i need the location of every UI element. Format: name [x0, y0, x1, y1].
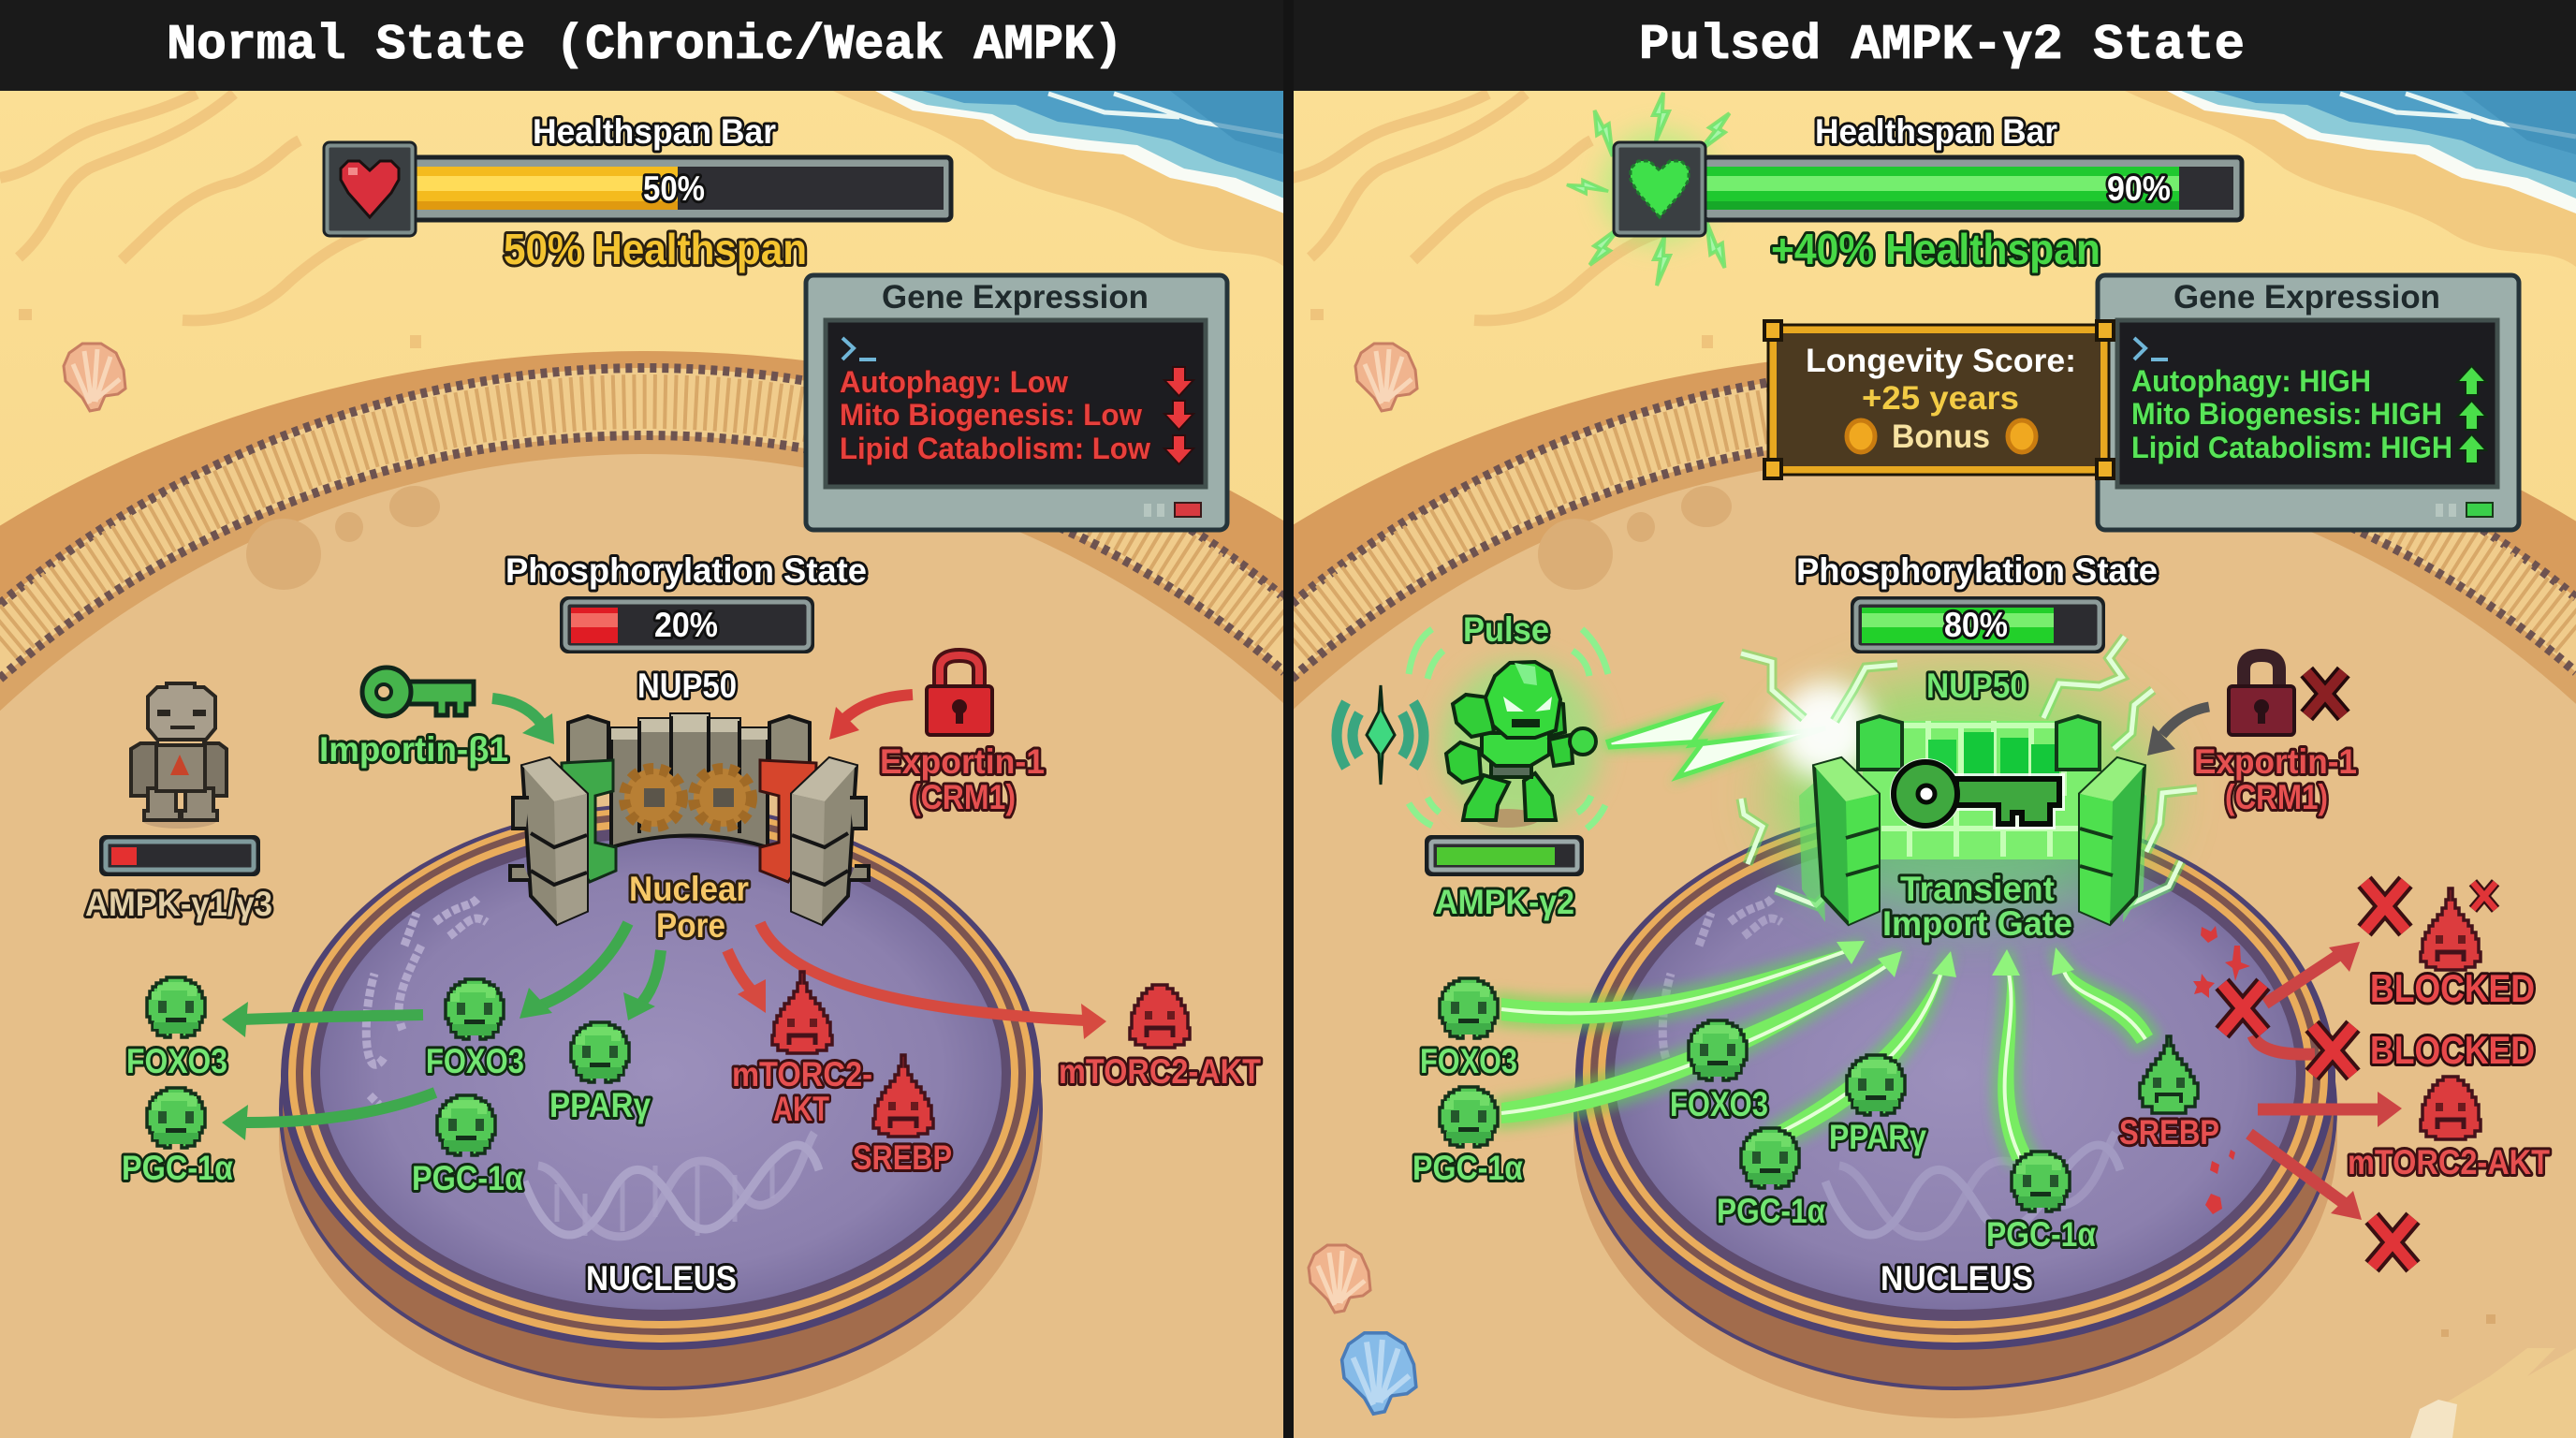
label: nuclear: Nuclear — [629, 870, 749, 908]
row: lipid catabolism: Lipid Catabolism: Low — [840, 432, 1150, 465]
icon: blocked lock — [2229, 655, 2294, 735]
panel: gene expression — [2098, 275, 2519, 530]
icon: FOXO3 inside — [1689, 1020, 1747, 1080]
label: SREBP: SREBP — [853, 1138, 952, 1177]
left panel background — [0, 91, 1283, 1438]
icon: small X — [2473, 883, 2496, 909]
label: nucleus: NUCLEUS — [1881, 1259, 2033, 1298]
row: autophagy: Autophagy: HIGH — [2131, 364, 2371, 398]
label: nup50: NUP50 — [1926, 667, 2027, 705]
pale shell fragment — [2410, 1400, 2457, 1438]
icon: mTORC2-AKT outside — [1130, 985, 1190, 1048]
phosphorylation value: 20% — [654, 606, 718, 644]
status lights — [1148, 504, 1161, 517]
label: AMPK gamma 1/3: AMPK-γ1/γ3 — [85, 885, 272, 923]
label: FOXO3 inside: FOXO3 — [426, 1042, 524, 1080]
arrow: lightning to gate — [1603, 700, 1830, 785]
label: import gate: Import Gate — [1882, 904, 2072, 943]
icon: exportin lock — [927, 655, 992, 735]
chromatin squiggles — [366, 899, 487, 1105]
gears — [624, 769, 752, 827]
label: mTORC2: mTORC2- — [732, 1055, 872, 1093]
label: FOXO3 inside: FOXO3 — [1670, 1085, 1768, 1123]
lightning burst — [1741, 637, 2197, 908]
icon: PGC-1α outside — [147, 1088, 205, 1148]
label: PPARγ: PPARγ — [549, 1086, 651, 1124]
text: years: +25 years — [1862, 380, 2019, 417]
row: mito biogenesis: Mito Biogenesis: Low — [840, 398, 1142, 432]
heading: healthspan bar: Healthspan Bar — [1815, 112, 2057, 151]
row: autophagy: Autophagy: Low — [840, 365, 1068, 399]
phosphorylation value: 80% — [1944, 606, 2008, 644]
heading: gene expression: Gene Expression — [2174, 279, 2440, 315]
label: AMPK gamma 2: AMPK-γ2 — [1435, 883, 1574, 921]
robot: AMPK gamma 2 — [1442, 660, 1601, 829]
icon: importin key — [362, 668, 474, 716]
icon: PGC-1α outside — [1440, 1087, 1498, 1147]
row: mito biogenesis: Mito Biogenesis: HIGH — [2131, 397, 2442, 431]
label: exportin: Exportin-1 — [2194, 742, 2357, 781]
phosphorylation bar 20% — [562, 598, 812, 652]
nucleus — [1573, 803, 2337, 1418]
icon: blocked X top — [2364, 882, 2406, 931]
icon: PGC-1α inside lower left — [1741, 1128, 1799, 1188]
icon: PGC-1α inside lower right — [2012, 1152, 2070, 1211]
label: SREBP: SREBP — [2119, 1113, 2219, 1152]
label: PGC-1α outside: PGC-1α — [122, 1149, 233, 1187]
label: transient: Transient — [1900, 870, 2055, 908]
right panel background — [1294, 91, 2576, 1438]
divider between panels — [1283, 0, 1294, 1438]
prompt — [842, 338, 876, 360]
icon: SREBP — [873, 1055, 933, 1137]
nuclear pore gate — [510, 714, 869, 924]
prompt — [2134, 338, 2168, 360]
green importin strip — [562, 760, 616, 882]
arrow: importin to pore — [492, 698, 554, 744]
green robot glow arcs — [1409, 629, 1608, 829]
glowing key — [1890, 758, 2059, 829]
arrows: red factors — [727, 923, 1106, 1039]
icon: pink shell — [1309, 1245, 1370, 1313]
label: crm1: (CRM1) — [2225, 778, 2328, 816]
panel: pulsed state — [1309, 93, 2576, 1438]
heading: gene expression: Gene Expression — [882, 279, 1149, 315]
phosphorylation bar 80% — [1852, 598, 2103, 652]
healthspan value: 90% — [2107, 169, 2171, 208]
icon: PGC-1α inside — [437, 1095, 495, 1155]
callout: 50% healthspan: 50% Healthspan — [504, 225, 807, 273]
DNA helix — [1825, 1133, 2120, 1237]
icon: green heart — [1631, 161, 1689, 217]
title: pulsed state: Pulsed AMPK-γ2 State — [1639, 17, 2245, 73]
red splatters — [2193, 926, 2250, 1214]
icon: blocked X center — [2222, 984, 2263, 1033]
heading: phosphorylation state: Phosphorylation State — [1796, 551, 2158, 590]
icon: blocked red blob — [2421, 888, 2481, 970]
icon: pulse wave — [1337, 685, 1424, 785]
energy glow around gate — [1769, 674, 2162, 917]
corner studs — [1764, 321, 2114, 478]
chromatin squiggles — [1662, 899, 1781, 1064]
weak AMPK level bar — [101, 837, 258, 874]
label: FOXO3 outside: FOXO3 — [126, 1042, 227, 1080]
label: FOXO3 outside: FOXO3 — [1420, 1042, 1517, 1080]
status lights — [2439, 504, 2452, 517]
panel: gene expression — [806, 275, 1227, 530]
icon: blocked X middle — [2312, 1026, 2353, 1075]
label: mTORC2-AKT: mTORC2-AKT — [2348, 1143, 2550, 1181]
label: PGC-1α lower right: PGC-1α — [1986, 1215, 2096, 1254]
icon: heart sparks — [1567, 93, 1734, 286]
nucleus — [279, 803, 1043, 1418]
icon: mTORC2-AKT inside — [772, 972, 832, 1053]
label: pore: Pore — [656, 906, 725, 945]
label: PGC-1α lower left: PGC-1α — [1717, 1192, 1825, 1230]
label: PPARγ: PPARγ — [1829, 1118, 1926, 1156]
icon: heart — [341, 161, 399, 217]
AMPK gamma 2 level bar — [1427, 837, 1582, 874]
icon: SREBP green — [2140, 1036, 2198, 1113]
label: AKT: AKT — [773, 1090, 829, 1128]
arrow: exportin — [829, 695, 913, 740]
arrows: exported factors — [222, 923, 661, 1140]
header bar — [0, 0, 2576, 91]
icon: FOXO3 inside — [446, 979, 504, 1039]
robot: weak AMPK — [131, 683, 227, 829]
icon: coins — [1847, 420, 2036, 452]
title: normal state: Normal State (Chronic/Weak AMPK) — [167, 17, 1123, 73]
callout: +40% healthspan: +40% Healthspan — [1771, 225, 2100, 273]
label: nucleus: NUCLEUS — [586, 1259, 737, 1298]
transient import gate — [1799, 716, 2146, 924]
healthspan bar 90% — [1614, 142, 2242, 236]
icon: down arrows — [1164, 367, 1193, 464]
red exportin strip — [760, 760, 816, 882]
healthspan value: 50% — [643, 169, 705, 208]
arrows: blocked red paths — [2249, 942, 2402, 1220]
label: nup50: NUP50 — [637, 667, 737, 705]
arrow: grey weak export — [2147, 707, 2209, 756]
label: exportin: Exportin-1 — [880, 742, 1045, 781]
label: importin: Importin-β1 — [319, 730, 508, 769]
icon: FOXO3 outside — [147, 977, 205, 1037]
icon: blue shell — [1342, 1333, 1416, 1414]
row: lipid catabolism: Lipid Catabolism: HIGH — [2131, 431, 2452, 464]
arrows: green import streams — [1501, 941, 2153, 1161]
healthspan bar 50% — [324, 142, 951, 236]
icon: FOXO3 outside — [1440, 978, 1498, 1038]
label: crm1: (CRM1) — [911, 778, 1016, 816]
icon: blocked X bottom — [2372, 1218, 2413, 1267]
panel: normal state — [85, 112, 1261, 1418]
heading: healthspan bar: Healthspan Bar — [533, 112, 776, 151]
label: mTORC2-AKT outside: mTORC2-AKT — [1059, 1052, 1261, 1091]
DNA helix — [524, 1133, 819, 1237]
icon: lock cross — [2306, 672, 2344, 715]
longevity score box — [1764, 321, 2114, 478]
label: pulse: Pulse — [1463, 610, 1549, 649]
sand pebbles — [2441, 1314, 2496, 1337]
icon: PPARγ — [1847, 1055, 1905, 1115]
text: bonus: Bonus — [1892, 418, 1990, 455]
label: blocked 1: BLOCKED — [2370, 966, 2535, 1010]
label: blocked 2: BLOCKED — [2370, 1028, 2535, 1072]
heading: phosphorylation state: Phosphorylation State — [505, 551, 867, 590]
text: longevity score: Longevity Score: — [1806, 343, 2076, 379]
sand splash corner — [2415, 1348, 2576, 1438]
icon: mTORC2-AKT — [2421, 1077, 2481, 1139]
icon: up arrows — [2457, 366, 2486, 463]
label: PGC-1α outside: PGC-1α — [1412, 1149, 1523, 1187]
icon: PPARγ — [571, 1022, 629, 1082]
label: PGC-1α inside: PGC-1α — [412, 1159, 523, 1197]
